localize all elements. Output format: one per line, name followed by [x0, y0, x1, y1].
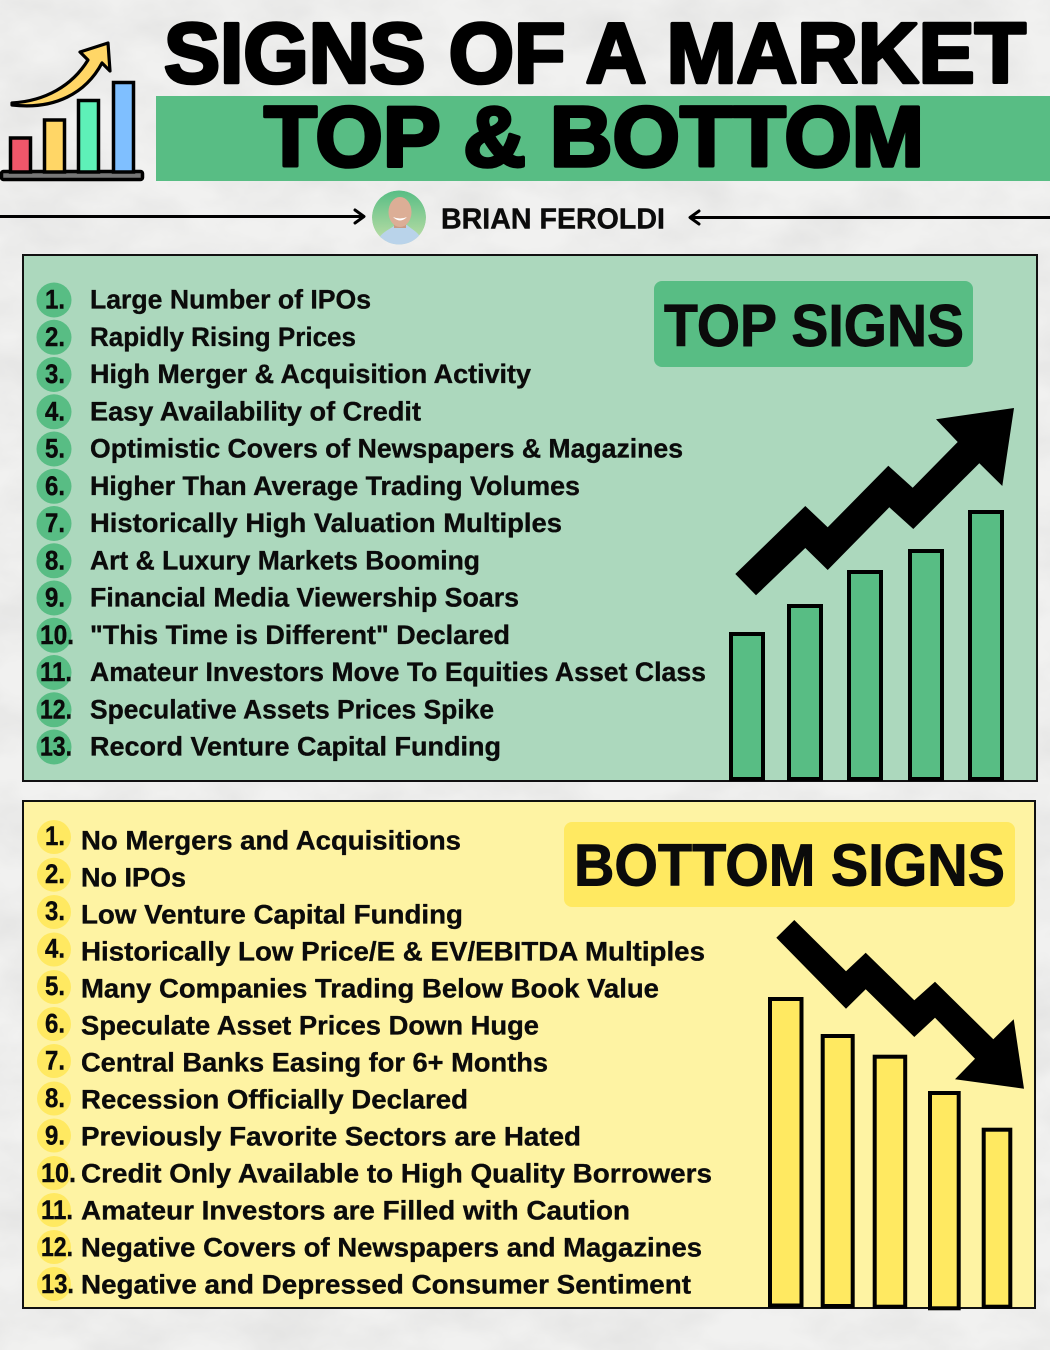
bottom sign 1: No Mergers and Acquisitions	[81, 826, 461, 856]
bottom sign 11: Amateur Investors are Filled with Caution	[81, 1196, 630, 1226]
bottom sign 2: No IPOs	[81, 862, 186, 892]
bottom sign 8: Recession Officially Declared	[81, 1084, 468, 1114]
top sign 13: Record Venture Capital Funding	[90, 732, 501, 762]
top sign 2: Rapidly Rising Prices	[90, 322, 356, 352]
chart: falling yellow bars	[770, 999, 1010, 1308]
bottom sign 10: 10.	[41, 1158, 76, 1188]
bottom sign 13: 13.	[41, 1269, 74, 1299]
icon: rising bar chart with arrow	[2, 43, 142, 180]
bottom sign 8: 8.	[45, 1083, 65, 1113]
top sign 7: 7.	[45, 508, 65, 538]
title: signs of a market: SIGNS OF A MARKET	[164, 6, 1026, 102]
bottom sign 12: Negative Covers of Newspapers and Magazines	[81, 1232, 702, 1262]
top sign 12: Speculative Assets Prices Spike	[90, 694, 494, 724]
author name: BRIAN FEROLDI	[441, 204, 665, 236]
bottom sign 5: 5.	[45, 971, 65, 1001]
top sign 12: 12.	[40, 694, 72, 724]
bottom sign 9: Previously Favorite Sectors are Hated	[81, 1122, 581, 1152]
bottom sign 13: Negative and Depressed Consumer Sentiment	[81, 1270, 691, 1300]
author avatar	[372, 190, 426, 246]
top sign 2: 2.	[45, 322, 65, 352]
bottom sign 7: Central Banks Easing for 6+ Months	[81, 1048, 548, 1078]
bottom sign 2: 2.	[45, 859, 65, 889]
top sign 1: Large Number of IPOs	[90, 284, 371, 314]
bottom sign 6: 6.	[45, 1008, 65, 1038]
list: top signs	[36, 282, 706, 764]
top sign 6: Higher Than Average Trading Volumes	[90, 471, 580, 501]
bottom sign 12: 12.	[41, 1232, 73, 1262]
top sign 1: 1.	[45, 284, 65, 314]
top sign 11: Amateur Investors Move To Equities Asset Class	[90, 657, 706, 687]
bottom sign 3: Low Venture Capital Funding	[81, 900, 463, 930]
top sign 8: Art & Luxury Markets Booming	[90, 545, 480, 575]
top sign 9: 9.	[45, 582, 65, 612]
top sign 7: Historically High Valuation Multiples	[90, 508, 562, 538]
top sign 5: 5.	[45, 434, 65, 464]
bottom sign 5: Many Companies Trading Below Book Value	[81, 974, 659, 1004]
top sign 5: Optimistic Covers of Newspapers & Magazines	[90, 434, 683, 464]
arrow: left pointing to author	[0, 210, 364, 223]
top sign 9: Financial Media Viewership Soars	[90, 582, 519, 612]
badge: bottom signs heading: BOTTOM SIGNS	[574, 832, 1005, 898]
top sign 10: "This Time is Different" Declared	[90, 620, 510, 650]
arrow: zigzag down	[776, 920, 1024, 1089]
bottom sign 4: Historically Low Price/E & EV/EBITDA Multiples	[81, 936, 705, 966]
top sign 3: High Merger & Acquisition Activity	[90, 359, 531, 389]
top sign 11: 11.	[40, 657, 72, 687]
bottom sign 6: Speculate Asset Prices Down Huge	[81, 1010, 539, 1040]
chart: rising green bars	[731, 512, 1002, 779]
bottom sign 11: 11.	[41, 1195, 73, 1225]
bottom sign 4: 4.	[45, 934, 65, 964]
top sign 8: 8.	[45, 545, 65, 575]
badge: top signs heading: TOP SIGNS	[664, 293, 964, 359]
top sign 10: 10.	[40, 620, 74, 650]
panel: top signs	[23, 255, 1037, 781]
top sign 3: 3.	[45, 359, 65, 389]
bottom sign 10: Credit Only Available to High Quality Borrowers	[81, 1158, 712, 1188]
bottom sign 3: 3.	[45, 896, 65, 926]
top sign 4: Easy Availability of Credit	[90, 396, 421, 426]
panel: bottom signs	[23, 801, 1035, 1308]
bottom sign 9: 9.	[45, 1120, 65, 1150]
arrow: right pointing to author	[690, 211, 1050, 224]
bottom sign 1: 1.	[45, 821, 65, 851]
top sign 6: 6.	[45, 471, 65, 501]
arrow: zigzag up	[735, 408, 1014, 595]
top sign 4: 4.	[45, 396, 65, 426]
bottom sign 2	[37, 858, 186, 892]
top sign 13: 13.	[40, 732, 72, 762]
title banner: TOP & BOTTOM	[264, 90, 924, 185]
bottom sign 7: 7.	[45, 1046, 65, 1076]
list: bottom signs	[37, 820, 712, 1301]
